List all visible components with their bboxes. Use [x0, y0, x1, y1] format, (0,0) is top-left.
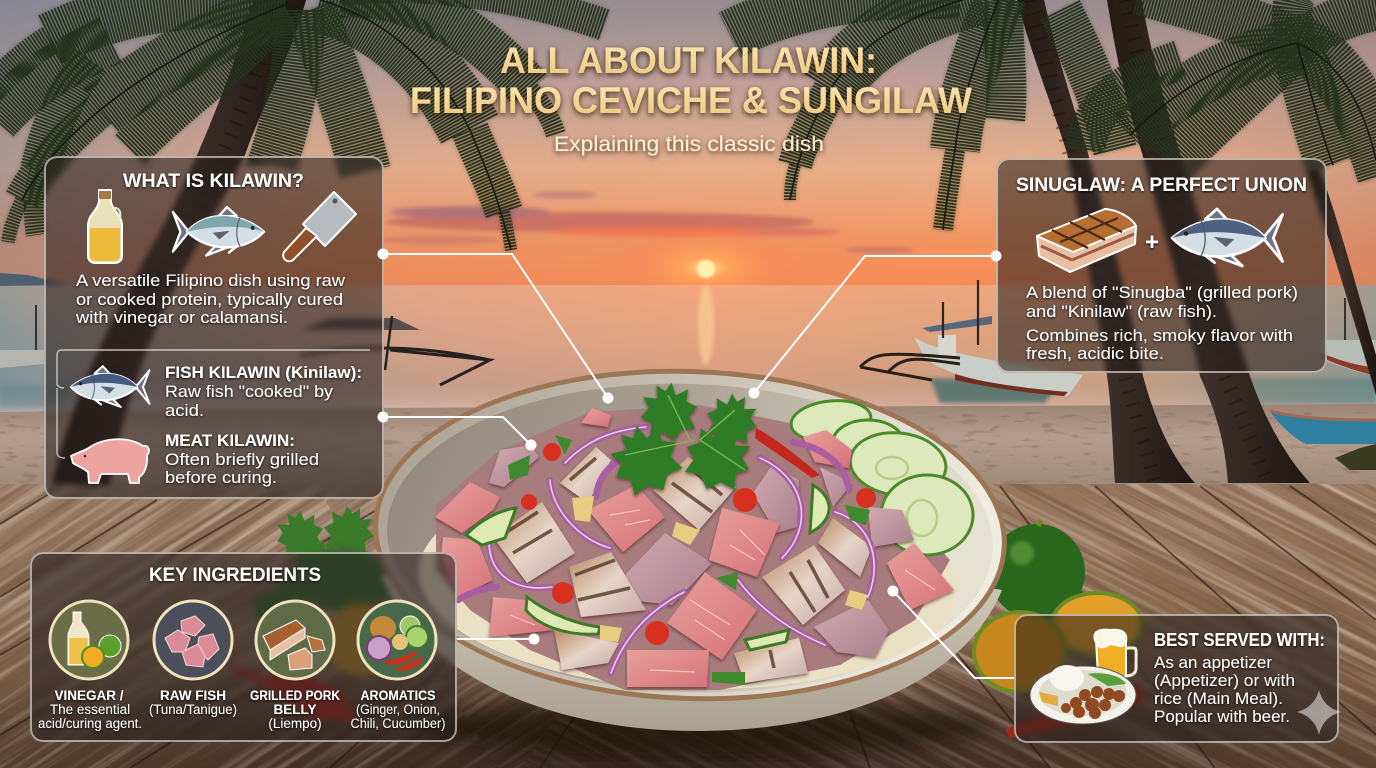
- chili and herbs: [508, 379, 876, 685]
- text: serving suggestions: As an appetizer: [1154, 654, 1273, 672]
- title: FILIPINO CEVICHE & SUNGILAW: [410, 80, 972, 121]
- icon: beer mug: [1094, 630, 1136, 679]
- text: definition: A versatile Filipino dish using raw: [76, 272, 345, 290]
- panel: what is kilawin: [44, 156, 384, 499]
- text: meat kilawin: [165, 432, 319, 487]
- title: [408, 40, 975, 162]
- icon: grilled pork: [1037, 209, 1136, 272]
- heading: what is kilawin: WHAT IS KILAWIN?: [123, 171, 304, 192]
- text: description: A blend of "Sinugba" (grilled pork): [1026, 284, 1298, 302]
- label: aromatics: Chili, Cucumber): [350, 716, 446, 731]
- icon: plate of rice and meat: [1030, 665, 1136, 724]
- tuna cubes: [435, 408, 954, 687]
- icon: grilled pork belly: [256, 601, 334, 679]
- text: description: fresh, acidic bite.: [1026, 345, 1164, 363]
- cucumber slices: [789, 397, 973, 555]
- label: grilled pork belly: [250, 688, 340, 731]
- heading: best served with: BEST SERVED WITH:: [1154, 630, 1325, 650]
- text: definition: or cooked protein, typically cured: [76, 291, 343, 309]
- label: raw fish: RAW FISH: [160, 688, 226, 703]
- wooden table: [0, 484, 1376, 768]
- text: serving suggestions: Popular with beer.: [1154, 708, 1290, 726]
- title: ALL ABOUT KILAWIN:: [500, 40, 877, 81]
- text: fish kilawin: FISH KILAWIN (Kinilaw):: [165, 364, 362, 382]
- label: vinegar: The essential: [50, 702, 130, 717]
- label: grilled pork belly: GRILLED PORK: [250, 688, 340, 703]
- text: fish kilawin: Raw fish "cooked" by: [165, 383, 334, 401]
- bowl rim: [367, 358, 1013, 712]
- icon: aromatics: [358, 601, 436, 679]
- label: vinegar: VINEGAR /: [54, 688, 124, 703]
- grilled pork pieces: [493, 447, 872, 683]
- food mass: [436, 405, 950, 690]
- icon: vinegar bottle: [88, 190, 122, 263]
- icon: fish kilawin: [71, 366, 150, 407]
- text: fish kilawin: [165, 364, 362, 420]
- cucumber pieces: [466, 485, 829, 650]
- boats: [0, 280, 1376, 470]
- panel: key ingredients: [30, 552, 457, 742]
- label: aromatics: AROMATICS: [360, 688, 436, 703]
- text: description: and "Kinilaw" (raw fish).: [1026, 303, 1217, 321]
- palm trunks: [52, 0, 1376, 486]
- icon: raw fish cubes: [154, 601, 232, 679]
- icon: pig: [71, 439, 149, 483]
- text: description: Combines rich, smoky flavor with: [1026, 327, 1293, 345]
- title: Explaining this classic dish: [554, 132, 824, 156]
- label: aromatics: [350, 688, 446, 731]
- panel: best served with: [1014, 614, 1339, 743]
- text: serving suggestions: rice (Main Meal).: [1154, 690, 1283, 708]
- text: description: [1026, 284, 1298, 363]
- label: raw fish: (Tuna/Tanigue): [149, 702, 237, 717]
- text: serving suggestions: [1154, 654, 1295, 726]
- text: serving suggestions: (Appetizer) or with: [1154, 672, 1295, 690]
- panel: sinuglaw: [996, 158, 1327, 373]
- plus sign: +: [1145, 229, 1159, 256]
- icon: tuna fish: [173, 207, 264, 256]
- clouds: [380, 191, 915, 253]
- text: meat kilawin: MEAT KILAWIN:: [165, 432, 295, 450]
- red onion slivers: [458, 427, 874, 673]
- text: meat kilawin: before curing.: [165, 469, 277, 487]
- heading: key ingredients: KEY INGREDIENTS: [149, 565, 321, 586]
- text: meat kilawin: Often briefly grilled: [165, 451, 319, 469]
- icon: vinegar and calamansi: [50, 601, 128, 679]
- text: definition: with vinegar or calamansi.: [75, 309, 288, 327]
- label: grilled pork belly: BELLY: [273, 702, 317, 717]
- label: vinegar: acid/curing agent.: [38, 716, 142, 731]
- label: grilled pork belly: (Liempo): [268, 716, 322, 731]
- limes on table: [972, 520, 1145, 738]
- heading: sinuglaw: SINUGLAW: A PERFECT UNION: [1016, 175, 1307, 196]
- bowl body: [382, 540, 1002, 731]
- label: vinegar: [38, 688, 142, 731]
- text: definition: [75, 272, 345, 327]
- palm fronds: [0, 0, 1376, 250]
- garnish on table: cilantro, lime, chili: [230, 502, 398, 722]
- icon: cleaver: [283, 192, 356, 261]
- icon: tuna: [1172, 209, 1283, 266]
- label: raw fish: [149, 688, 237, 717]
- text: fish kilawin: acid.: [165, 402, 204, 420]
- label: aromatics: (Ginger, Onion,: [356, 702, 440, 717]
